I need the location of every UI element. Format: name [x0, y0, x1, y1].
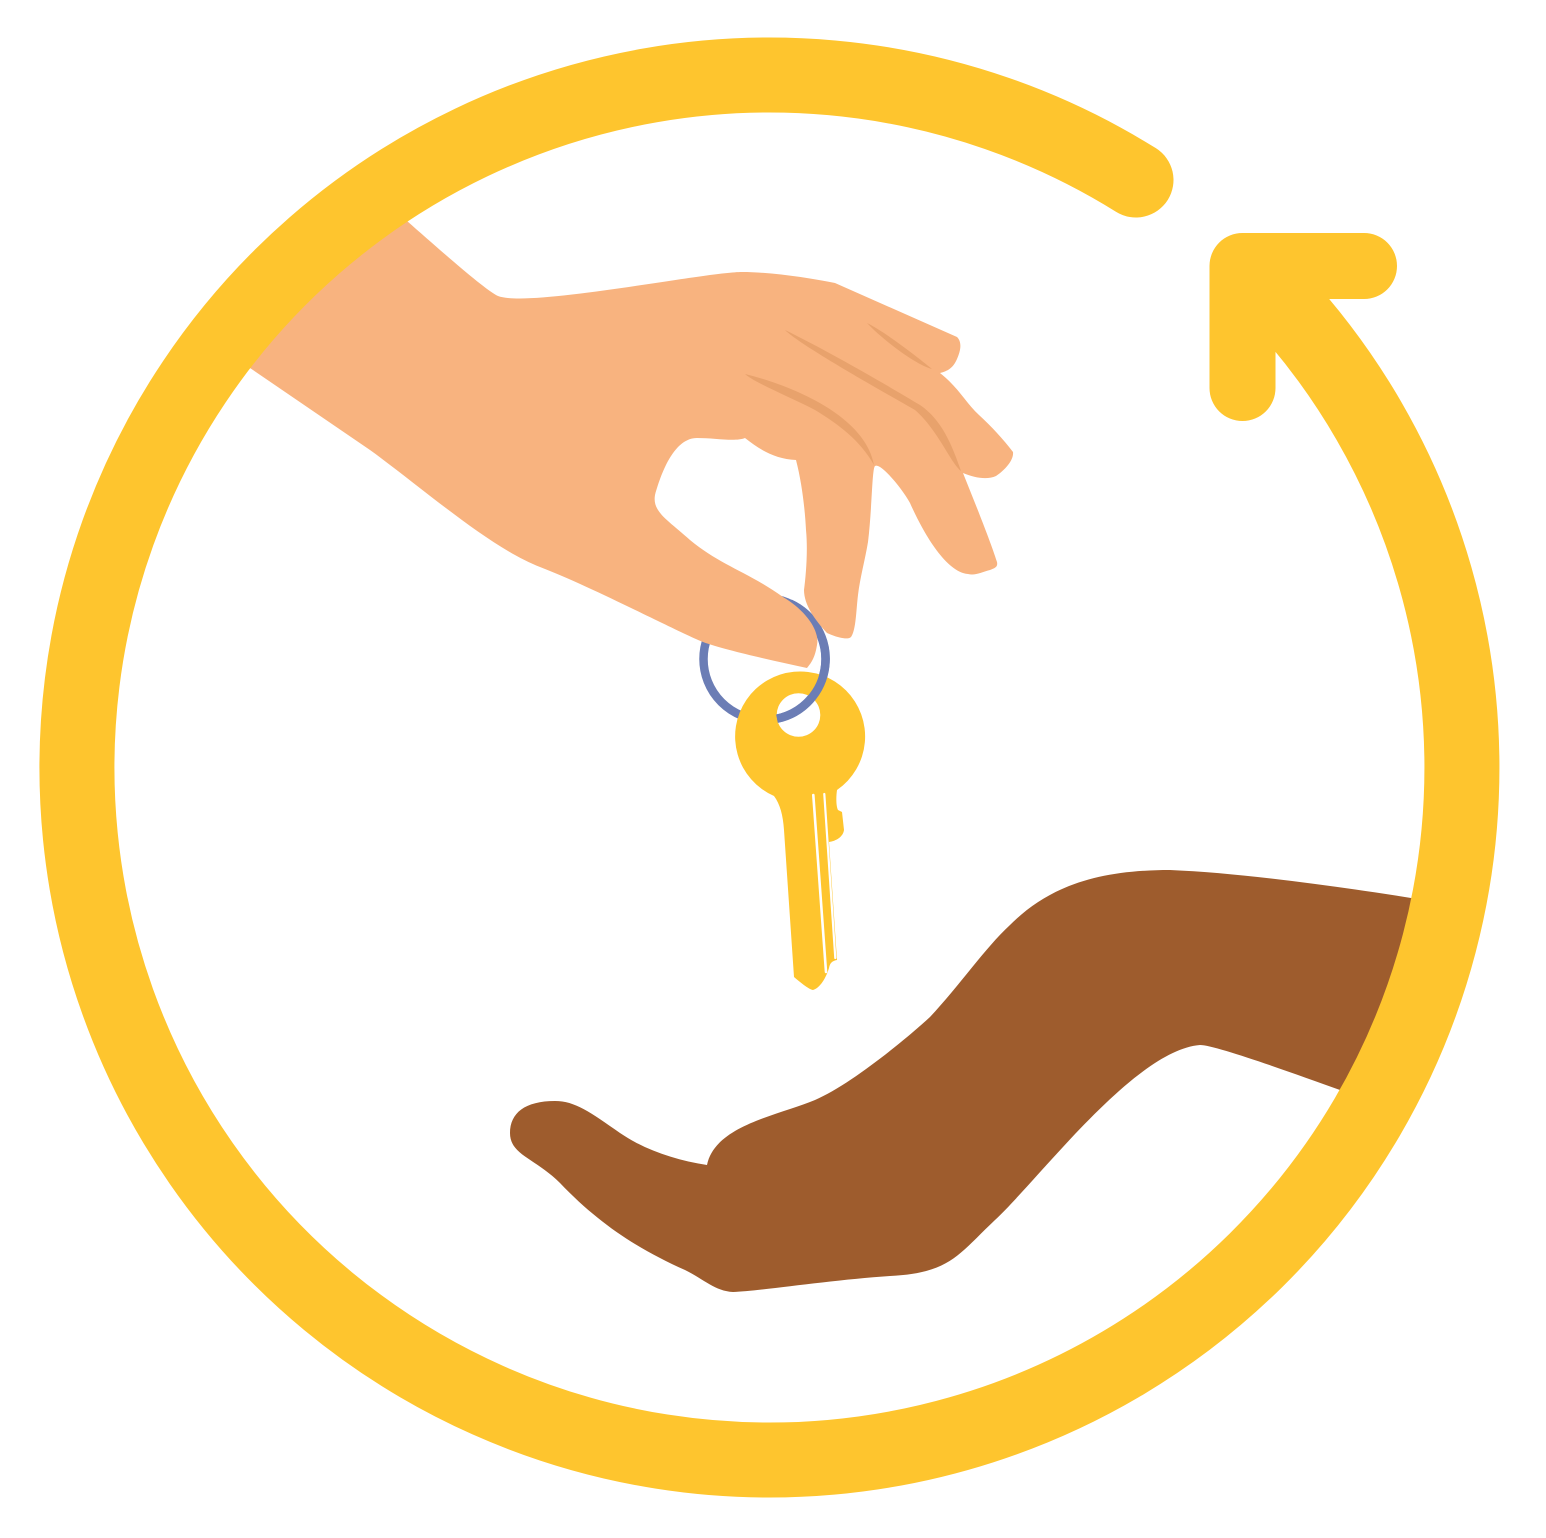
upper hand shape — [215, 195, 1013, 668]
arrow head — [1242, 266, 1364, 388]
key blade groove two — [824, 794, 835, 958]
key blade groove one — [813, 795, 826, 972]
icon: key — [735, 671, 865, 990]
upper hand holding key — [215, 195, 1013, 668]
icon: key ring front section — [777, 604, 826, 719]
lower open hand receiving key — [510, 870, 1445, 1292]
finger crease: middle — [785, 330, 961, 471]
icon: key ring back section — [704, 598, 826, 720]
finger crease: upper — [867, 323, 932, 369]
finger crease: lower — [745, 374, 874, 465]
key body with head, blade and bit — [735, 671, 865, 990]
